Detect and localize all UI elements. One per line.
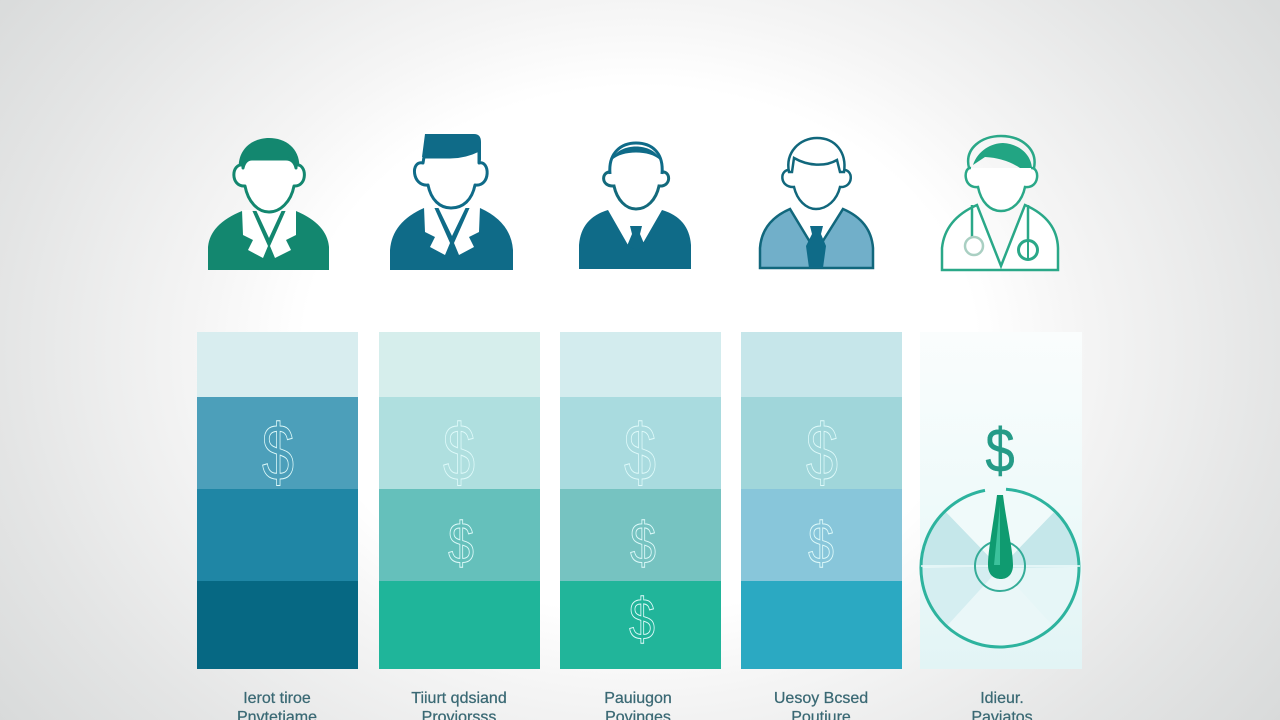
label: column 1: Ierot tiroe bbox=[243, 690, 311, 707]
icon: dollar small: $ bbox=[448, 511, 474, 576]
icon: dollar green: $ bbox=[985, 417, 1015, 486]
icon: dollar: $ bbox=[624, 408, 656, 497]
label: column 5: Idieur. bbox=[980, 690, 1024, 707]
chart: column 2 stacked bar bbox=[379, 332, 540, 669]
gauge needle bbox=[988, 495, 1013, 579]
icon: person 5, doctor with stethoscope bbox=[942, 136, 1058, 270]
label: column 3: Pauiugon bbox=[604, 690, 672, 707]
icon: dollar small: $ bbox=[808, 511, 834, 576]
gauge dial bbox=[921, 489, 1080, 647]
label: column 4: Uesoy Bcsed bbox=[774, 690, 868, 707]
icon: dollar: $ bbox=[806, 408, 838, 497]
panel: column 5 with gauge bbox=[920, 332, 1082, 669]
icon: dollar lower: $ bbox=[629, 587, 655, 652]
icon: person 1, green suit bbox=[208, 138, 329, 270]
icon: person 4, light blue suit bbox=[760, 138, 873, 268]
chart: column 3 stacked bar bbox=[560, 332, 721, 669]
label: column 2: Tiiurt qdsiand bbox=[411, 690, 507, 707]
chart: column 1 stacked bar bbox=[197, 332, 358, 669]
icon: dollar: $ bbox=[262, 408, 294, 497]
chart: column 4 stacked bar bbox=[741, 332, 902, 669]
icon: dollar small: $ bbox=[630, 511, 656, 576]
icon: person 3, tie bbox=[579, 143, 691, 269]
icon: person 2, navy suit bbox=[390, 134, 513, 270]
icon: dollar: $ bbox=[443, 408, 475, 497]
